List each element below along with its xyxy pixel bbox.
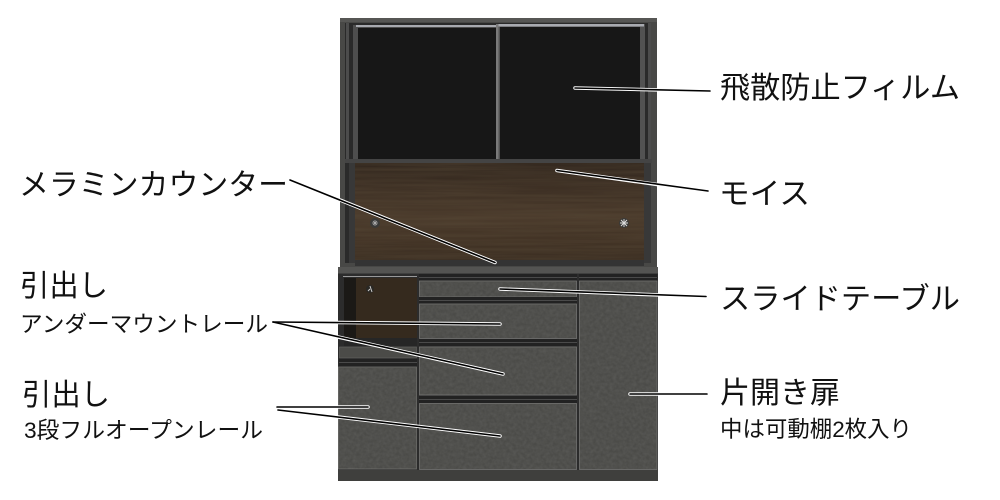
left niche bbox=[342, 275, 417, 346]
small drawer front bbox=[340, 347, 416, 358]
wood back panel bbox=[355, 163, 644, 260]
leader: undermount rail 2 bbox=[273, 322, 503, 374]
label: drawer full-open: 3段フルオープンレール bbox=[24, 418, 263, 443]
label: drawer undermount: 引出し bbox=[20, 270, 108, 303]
label: drawer undermount bbox=[20, 270, 268, 337]
outlet right bbox=[619, 218, 629, 228]
label: slide table: スライドテーブル bbox=[720, 283, 960, 316]
label: drawer full-open bbox=[22, 379, 263, 443]
leader: moisture bbox=[557, 170, 708, 191]
upper cabinet bbox=[340, 18, 657, 268]
leader: slide table bbox=[500, 289, 706, 296]
label: hinged door: 中は可動棚2枚入り bbox=[720, 417, 912, 442]
leader: hinged door bbox=[630, 392, 707, 396]
melamine counter bbox=[338, 267, 658, 274]
lower cabinet bbox=[338, 267, 658, 481]
leader: melamine counter bbox=[290, 180, 495, 262]
leader: full-open rail 2 bbox=[278, 410, 500, 436]
plinth bbox=[338, 470, 658, 481]
drawer 1 bbox=[420, 281, 576, 297]
leader: full-open rail 1 bbox=[277, 405, 368, 409]
label: film: 飛散防止フィルム bbox=[720, 72, 960, 105]
outlet left bbox=[370, 218, 380, 228]
label: hinged door: 片開き扉 bbox=[720, 377, 840, 410]
left door bbox=[338, 367, 416, 469]
left glass door bbox=[353, 25, 496, 159]
drawer 2 bbox=[420, 304, 576, 338]
label: drawer undermount: アンダーマウントレール bbox=[20, 312, 268, 337]
leader: film bbox=[575, 88, 710, 91]
label: hinged door bbox=[720, 377, 912, 442]
leader: undermount rail 1 bbox=[273, 322, 500, 324]
label: drawer full-open: 引出し bbox=[22, 379, 110, 412]
cabinet bbox=[338, 18, 658, 481]
label: moisture: モイス bbox=[719, 178, 810, 211]
label: melamine counter: メラミンカウンター bbox=[19, 169, 288, 202]
leader lines bbox=[273, 88, 710, 436]
right glass door bbox=[496, 24, 645, 159]
drawer 4 bbox=[420, 404, 576, 470]
right door bbox=[579, 274, 657, 470]
middle drawers bbox=[419, 274, 577, 470]
drawer 3 bbox=[420, 347, 576, 395]
